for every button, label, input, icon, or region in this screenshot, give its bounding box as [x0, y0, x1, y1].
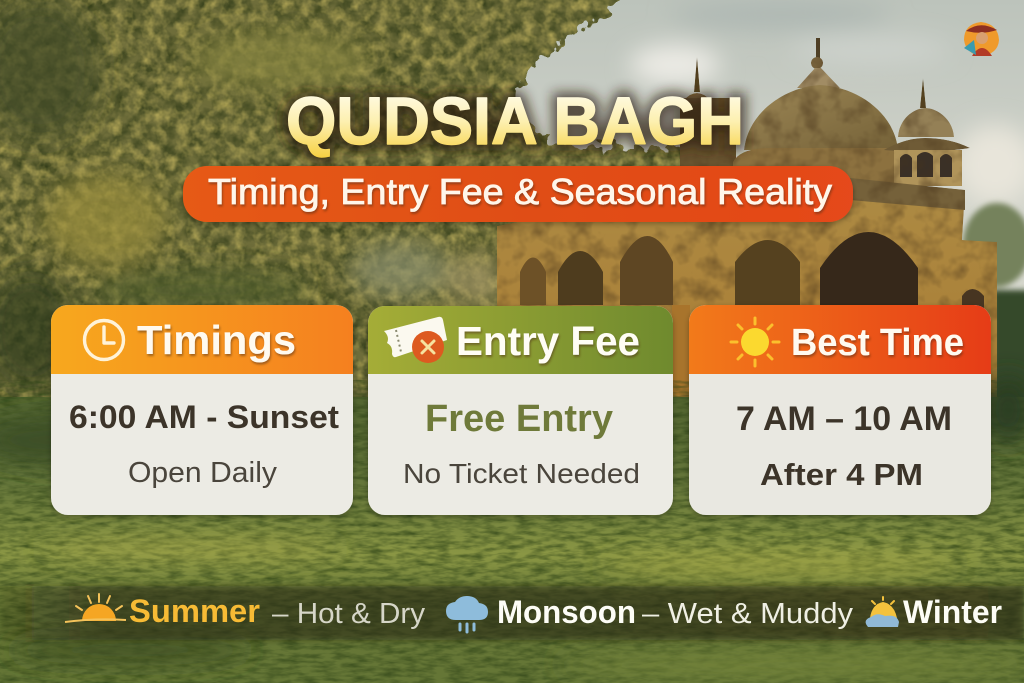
summer description: – Hot & Dry	[272, 598, 426, 630]
clouds	[630, 1, 1024, 205]
icon: sun	[731, 318, 779, 366]
icon: summer sun	[65, 594, 126, 622]
icon: winter sun and cloud	[866, 597, 899, 627]
monsoon description: – Wet & Muddy	[642, 598, 854, 630]
season strip	[0, 586, 1024, 640]
icon: rain cloud	[446, 596, 488, 632]
timings note: Open Daily	[128, 457, 278, 489]
subtitle pill: Timing, Entry Fee & Seasonal Reality	[208, 171, 832, 212]
timings hours: 6:00 AM - Sunset	[69, 399, 339, 435]
drum under dome	[733, 148, 897, 200]
monsoon label: Monsoon	[497, 594, 636, 630]
left spire and turret	[680, 57, 736, 198]
panel: best time	[689, 305, 991, 515]
panel: timings	[51, 305, 353, 515]
tree canopy on left	[0, 0, 690, 420]
best time heading: Best Time	[791, 322, 964, 364]
timings heading: Timings	[137, 317, 296, 363]
summer label: Summer	[129, 593, 260, 629]
facade cornice	[850, 178, 965, 210]
lower wall between cards	[672, 305, 690, 395]
icon: clock	[84, 320, 124, 360]
best time header band	[689, 305, 991, 374]
small chhatri	[884, 78, 970, 186]
distant tree on right	[963, 203, 1024, 440]
logo badge	[964, 22, 999, 56]
arches	[520, 232, 984, 310]
subtitle pill	[183, 166, 853, 222]
morning window: 7 AM – 10 AM	[736, 400, 952, 438]
entry fee heading: Entry Fee	[456, 318, 640, 364]
entry fee value: Free Entry	[425, 398, 613, 440]
panel: entry fee	[368, 306, 673, 515]
winter label: Winter	[903, 594, 1002, 630]
canopy light and shade	[0, 0, 505, 390]
timings header band	[51, 305, 353, 374]
title: QUDSIA BAGH	[286, 84, 744, 159]
mausoleum building	[497, 38, 997, 400]
background photo: sky	[0, 0, 1024, 420]
afternoon window: After 4 PM	[760, 457, 923, 492]
entry fee header band	[368, 306, 673, 374]
grass lawn	[0, 397, 1024, 683]
dark glow behind title: QUDSIA BAGH	[285, 84, 745, 160]
facade	[497, 180, 997, 400]
entry fee note: No Ticket Needed	[403, 458, 640, 489]
grass shading	[0, 376, 1024, 677]
icon: ticket with cross	[384, 317, 447, 363]
main dome	[744, 38, 898, 150]
